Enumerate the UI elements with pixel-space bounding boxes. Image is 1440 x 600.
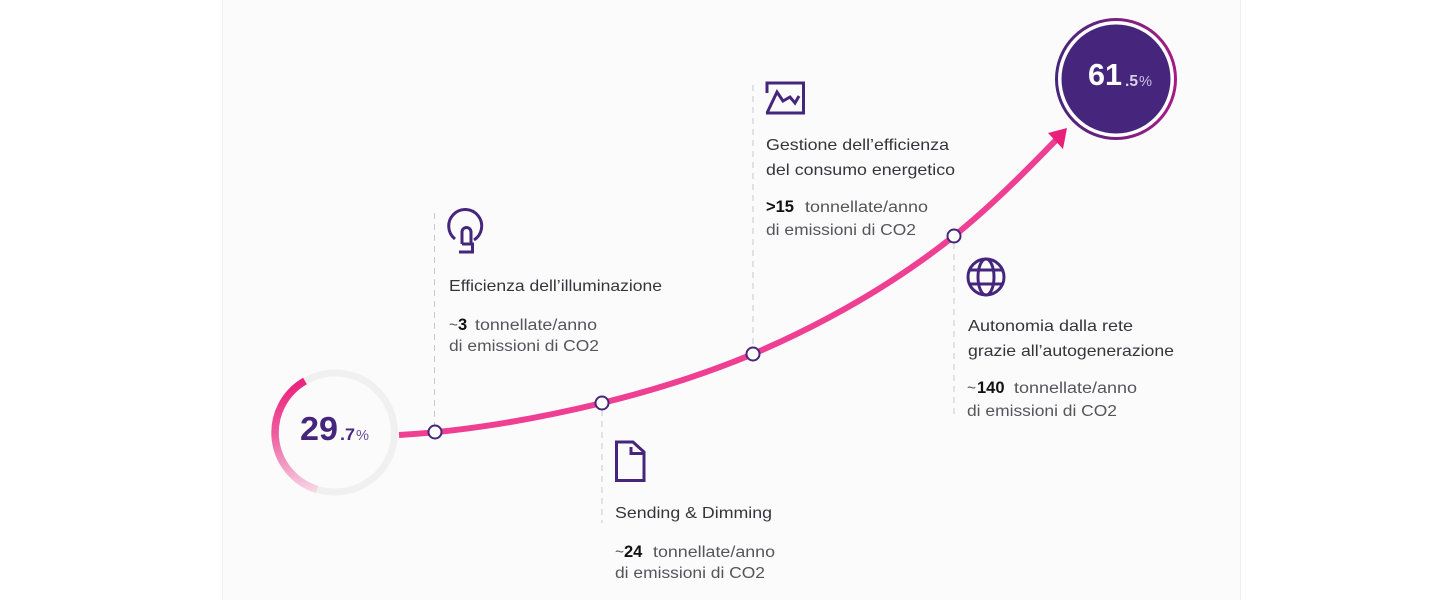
end badge: 61.5%: .5	[1125, 73, 1138, 90]
emissions label 4: di emissioni di CO2	[967, 403, 1117, 420]
start gauge: 29.7%: 29	[300, 410, 338, 447]
start gauge: 29.7%	[275, 373, 394, 492]
start gauge: 29.7%: .7	[340, 425, 355, 444]
saving: grid autonomy: 140	[977, 379, 1005, 397]
saving: energy management: tonnellate/anno	[805, 199, 928, 216]
saving: grid autonomy: ~	[967, 380, 976, 397]
step: sending and dimming	[615, 442, 775, 582]
curve marker 3	[746, 348, 760, 360]
end badge: 61.5%: 61	[1088, 57, 1122, 92]
heading: energy management line 1: Gestione dell’efficienza	[766, 137, 949, 154]
step: grid autonomy	[967, 259, 1174, 420]
end badge: 61.5%: %	[1139, 73, 1152, 90]
emissions label 1: di emissioni di CO2	[449, 338, 599, 355]
heading: grid autonomy line 2: grazie all’autogenerazione	[968, 343, 1174, 360]
step: energy consumption management	[766, 83, 955, 239]
saving: energy management: >15	[766, 198, 794, 216]
saving: lighting efficiency: ~	[449, 317, 458, 334]
end badge: 61.5%	[1056, 20, 1176, 138]
icon: light bulb	[449, 210, 482, 252]
step: lighting efficiency	[449, 210, 662, 355]
saving: sending and dimming: ~	[615, 544, 624, 561]
icon: document	[616, 442, 644, 480]
heading: lighting efficiency: Efficienza dell’illuminazione	[449, 278, 662, 295]
saving: lighting efficiency: tonnellate/anno	[475, 317, 597, 334]
heading: energy management line 2: del consumo energetico	[766, 162, 955, 179]
start gauge: 29.7%: %	[356, 427, 369, 444]
heading: grid autonomy line 1: Autonomia dalla rete	[968, 318, 1133, 335]
growth curve arrow	[399, 128, 1067, 435]
saving: grid autonomy: tonnellate/anno	[1014, 380, 1137, 397]
saving: sending and dimming: tonnellate/anno	[653, 544, 775, 561]
saving: sending and dimming: 24	[624, 543, 643, 561]
curve marker 2	[596, 396, 608, 410]
emissions label 3: di emissioni di CO2	[766, 222, 916, 239]
emissions label 2: di emissioni di CO2	[615, 565, 765, 582]
background panel	[222, 0, 1240, 600]
curve marker 4	[948, 230, 960, 242]
saving: lighting efficiency: 3	[458, 316, 467, 334]
heading: sending and dimming: Sending & Dimming	[615, 505, 772, 522]
icon: globe	[968, 259, 1004, 295]
curve marker 1	[428, 426, 442, 438]
icon: chart	[766, 83, 804, 113]
